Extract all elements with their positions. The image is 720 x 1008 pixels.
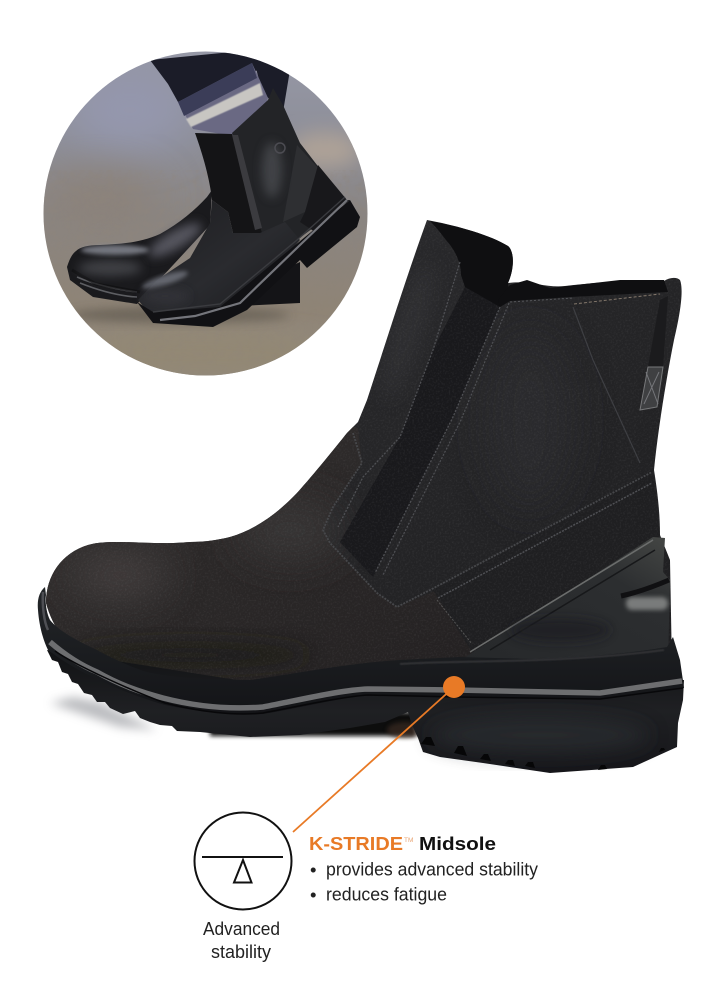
callout leader line [293, 687, 454, 832]
main boot product image [30, 210, 690, 773]
boot: collar lining [430, 221, 513, 307]
icon caption: Advanced [203, 919, 280, 939]
callout text block [309, 833, 539, 905]
icon: balance / stability [194, 812, 292, 910]
boot: textured heel counter [458, 537, 670, 664]
photo: rear boot [67, 190, 300, 306]
photo: front boot stripe and sole [137, 200, 360, 327]
callout marker dot [443, 676, 465, 698]
benefit list: reduces fatigue [326, 884, 447, 904]
photo: front boot upper [137, 88, 360, 327]
callout heading: TM [404, 837, 413, 844]
callout heading: Midsole [419, 833, 496, 854]
boot: lower rear band [434, 534, 660, 608]
boot: stitching and seams [323, 262, 660, 644]
boot: rear pull tab [640, 296, 668, 410]
benefit list [310, 858, 539, 905]
boot: zipper top and rear collar [498, 280, 668, 307]
boot: leather upper [30, 210, 690, 700]
photo: striped sock [178, 63, 268, 137]
benefit list: • [310, 859, 316, 880]
photo: zipper [232, 135, 262, 230]
photo: boots being worn, circular inset [40, 50, 370, 381]
benefit list: • [310, 884, 316, 905]
boot: midsole with grey stripe [38, 587, 684, 715]
callout heading [309, 833, 496, 854]
icon caption [203, 919, 280, 962]
soft shadow below boot [50, 697, 423, 738]
benefit list: provides advanced stability [326, 858, 539, 880]
callout heading: K-STRIDE [309, 833, 403, 854]
photo: ground shadow [70, 307, 290, 323]
icon caption: stability [211, 942, 271, 962]
boot: elastic gore panel [340, 287, 500, 577]
boot: heel tread notches [421, 737, 665, 770]
photo: dark trouser legs [150, 52, 290, 107]
boot: outsole with heel block [47, 650, 684, 773]
